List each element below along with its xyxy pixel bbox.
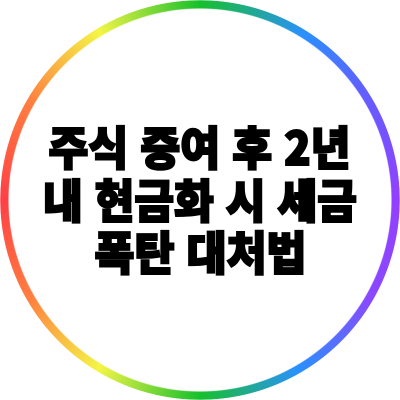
- title line 3: 폭탄 대처법: [94, 218, 306, 284]
- title line 1: 주식 증여 후 2년: [48, 113, 350, 179]
- title line 2: 내 현금화 시 세금: [43, 166, 357, 232]
